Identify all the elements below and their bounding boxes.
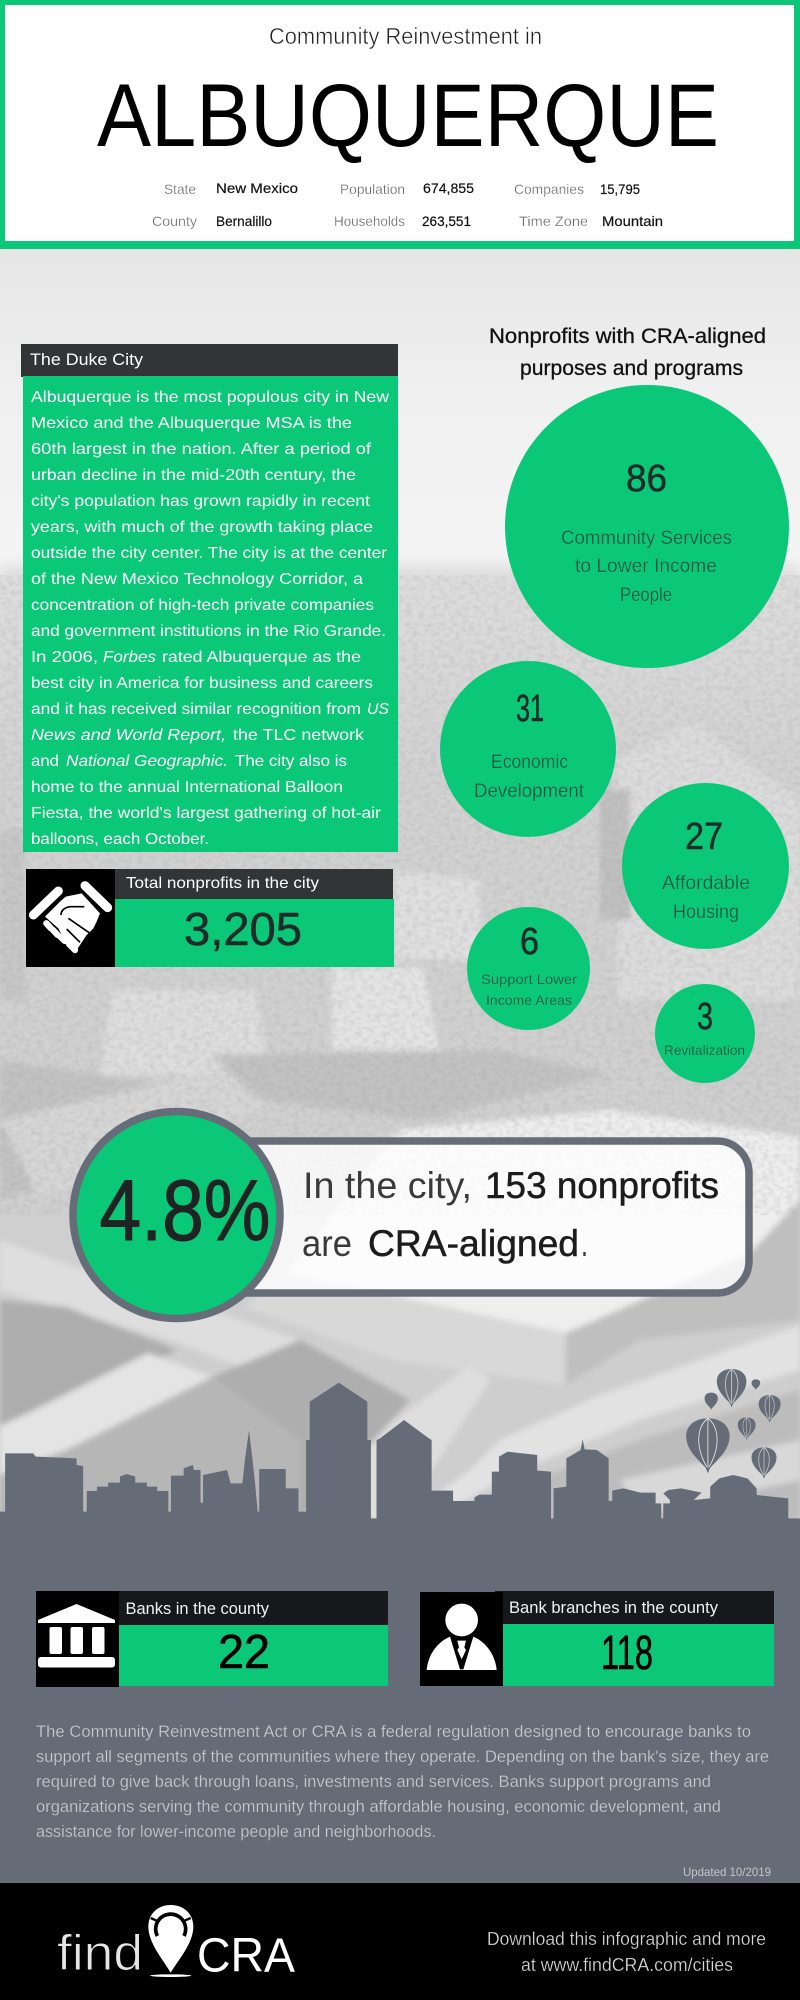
text block: about the CRA: support all segments of the communities where they operate. Depending on the bank's size, they are — [36, 1747, 769, 1766]
update date: Updated 10/2019 — [683, 1865, 771, 1879]
stat: banks in the county — [36, 1591, 388, 1687]
description text: rated Albuquerque as the — [162, 649, 361, 666]
panel heading: The Duke City — [30, 350, 144, 369]
city facts: 263,551 — [422, 213, 471, 229]
logo: findCRA: find — [57, 1925, 143, 1981]
description text: years, with much of the growth taking place — [31, 519, 373, 536]
bubble: economic development 31 — [440, 661, 616, 837]
download note: at www.findCRA.com/cities — [521, 1955, 733, 1975]
icon: bank building — [38, 1604, 115, 1668]
description text: National Geographic. — [66, 753, 228, 770]
city facts: 15,795 — [600, 181, 640, 197]
description text: US — [367, 701, 389, 718]
city facts: Time Zone — [519, 213, 588, 229]
city facts: State — [164, 181, 196, 197]
bubble: community services 86: People — [620, 585, 672, 606]
description text: and — [31, 753, 59, 770]
city facts: Households — [334, 213, 405, 229]
description text — [23, 376, 398, 852]
description text: News and World Report, — [31, 727, 226, 744]
logo: findCRA: CRA — [197, 1930, 295, 1982]
text block: about the CRA: organizations serving the community through affordable housing, economic development, and — [36, 1797, 721, 1816]
text block: about the CRA: assistance for lower-income people and neighborhoods. — [36, 1822, 436, 1841]
city facts: Population — [340, 181, 405, 197]
description text: balloons, each October. — [31, 831, 209, 848]
city title: ALBUQUERQUE — [97, 65, 719, 165]
icon: handshake — [33, 886, 108, 952]
callout text box: are — [302, 1223, 352, 1264]
bubble: affordable housing 27 — [622, 783, 789, 949]
header panel — [0, 0, 800, 249]
city facts: Mountain — [602, 213, 663, 229]
text block: about the CRA: required to give back through loans, investments and services. Banks support programs and — [36, 1772, 711, 1791]
callout text box: CRA-aligned — [368, 1223, 579, 1264]
bubble: economic development 31: Development — [474, 781, 585, 802]
bubble: community services 86: Community Services — [561, 528, 732, 549]
stat value: 118 — [601, 1627, 653, 1680]
description text: concentration of high-tech private companies — [31, 597, 374, 614]
bubble: community services 86: to Lower Income — [575, 556, 717, 577]
callout: CRA-aligned share — [73, 1112, 749, 1318]
bubble: community services 86 — [505, 385, 789, 668]
description text: and it has received similar recognition from — [31, 701, 361, 718]
bubble: affordable housing 27: Housing — [673, 902, 739, 923]
description text: outside the city center. The city is at the center — [31, 545, 388, 562]
callout text box: . — [581, 1223, 588, 1264]
description text: best city in America for business and careers — [31, 675, 373, 692]
city facts: Bernalillo — [216, 213, 272, 229]
bubble: economic development 31: 31 — [516, 688, 544, 730]
callout text box: In the city, — [303, 1165, 472, 1206]
skyline silhouette and ground panel — [0, 1383, 800, 1885]
icon: person in suit — [427, 1604, 497, 1670]
background: grayscale city photo — [0, 249, 800, 1565]
bubble: revitalization 3 — [655, 984, 755, 1083]
download note — [487, 1929, 766, 1975]
bubble: support lower income areas 6 — [467, 907, 590, 1030]
description text: city's population has grown rapidly in recent — [31, 493, 371, 510]
stat: total nonprofits — [26, 869, 394, 967]
callout text box — [200, 1141, 749, 1293]
bubble: affordable housing 27: Affordable — [662, 873, 750, 894]
stat label: Banks in the county — [126, 1599, 269, 1618]
description text: In 2006, — [31, 649, 98, 666]
description text: Fiesta, the world's largest gathering of hot-air — [31, 805, 382, 822]
bubble: support lower income areas 6: 6 — [520, 921, 539, 963]
heading: nonprofits with CRA-aligned purposes — [489, 325, 766, 380]
city facts: County — [152, 213, 197, 229]
description text: the TLC network — [233, 727, 365, 744]
bubble: support lower income areas 6: Income Areas — [486, 992, 572, 1008]
footer panel — [0, 1883, 800, 2000]
heading: nonprofits with CRA-aligned purposes: Nonprofits with CRA-aligned — [489, 325, 766, 348]
stat value: 3,205 — [184, 903, 302, 955]
stat: bank branches in the county — [420, 1591, 774, 1686]
description text: urban decline in the mid-20th century, the — [31, 467, 356, 484]
bubble: community services 86: 86 — [626, 458, 667, 500]
city facts — [152, 180, 663, 229]
text block: about the CRA: The Community Reinvestment Act or CRA is a federal regulation designed to encourage banks to — [36, 1722, 751, 1741]
city facts: 674,855 — [423, 180, 474, 196]
bubble: support lower income areas 6: Support Lower — [481, 971, 577, 987]
stat label: Total nonprofits in the city — [126, 875, 319, 892]
bubble: revitalization 3: Revitalization — [664, 1042, 745, 1058]
bubble chart: nonprofit categories — [440, 385, 789, 1083]
city facts: Companies — [514, 181, 584, 197]
stat label: Bank branches in the county — [509, 1598, 718, 1617]
description text: Mexico and the Albuquerque MSA is the — [31, 415, 352, 432]
percentage circle: 4.8% — [100, 1163, 270, 1259]
icon: hot-air balloons — [686, 1369, 781, 1479]
description text: and government institutions in the Rio Grande. — [31, 623, 386, 640]
subtitle: Community Reinvestment in — [269, 23, 542, 49]
text block: about the CRA — [36, 1722, 769, 1841]
bubble: economic development 31: Economic — [491, 752, 568, 773]
bubble: affordable housing 27: 27 — [685, 816, 723, 858]
panel heading — [21, 344, 398, 377]
description text: home to the annual International Balloon — [31, 779, 343, 796]
download note: Download this infographic and more — [487, 1929, 766, 1949]
callout text box: 153 nonprofits — [485, 1165, 719, 1206]
description text: 60th largest in the nation. After a period of — [31, 441, 372, 458]
stat value: 22 — [218, 1626, 270, 1679]
percentage circle — [73, 1112, 280, 1318]
city facts: New Mexico — [216, 180, 298, 196]
logo: findCRA — [57, 1905, 295, 1982]
description text: Albuquerque is the most populous city in New — [31, 389, 389, 406]
panel: the duke city — [21, 344, 398, 852]
description text: The city also is — [235, 753, 347, 770]
description text: Forbes — [103, 649, 156, 666]
description text: of the New Mexico Technology Corridor, a — [31, 571, 363, 588]
bubble: revitalization 3: 3 — [697, 996, 713, 1038]
heading: nonprofits with CRA-aligned purposes: purposes and programs — [520, 357, 743, 380]
